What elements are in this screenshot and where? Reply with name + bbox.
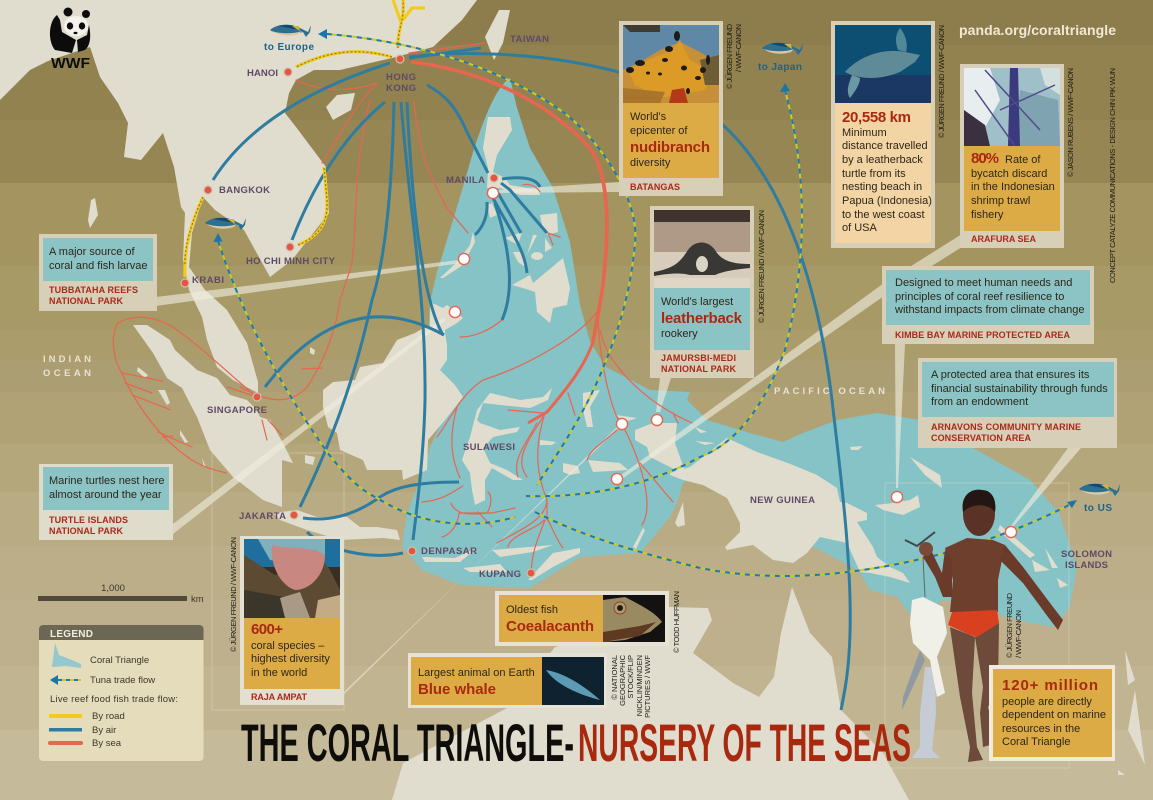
panel: Jamursbi-Medi leatherback rookery: World's largest — [661, 296, 733, 308]
city labels: MANILA — [446, 175, 485, 186]
city labels: NEW GUINEA — [750, 495, 815, 506]
panel: Raja Ampat coral: 600+ — [251, 621, 283, 638]
coral triangle region — [402, 78, 1077, 627]
legend: Tuna trade flow — [90, 675, 155, 686]
panel: Blue whale: Largest animal on Earth — [418, 667, 535, 679]
panel: leatherback turtle distance: of USA — [842, 222, 878, 234]
panel: Tubbataha: coral and fish larvae — [49, 260, 147, 272]
panel: Raja Ampat coral: coral species – — [251, 640, 325, 652]
photo credit: STOCK/FLIP — [626, 655, 635, 699]
ocean labels: PACIFIC OCEAN — [774, 386, 885, 397]
callout beams — [156, 182, 1081, 702]
photo credit — [610, 654, 652, 718]
panel: Jamursbi-Medi leatherback rookery — [650, 206, 754, 378]
panel: leatherback turtle distance: by a leatherback — [842, 154, 923, 166]
panel: Coelacanth — [495, 591, 669, 646]
panel: 120+ million — [989, 665, 1115, 761]
scale bar: 1,000 — [101, 583, 125, 594]
legend — [39, 625, 204, 761]
photo credit — [1005, 592, 1023, 658]
website link: panda.org/coraltriangle — [959, 22, 1116, 38]
panel: Blue whale — [408, 653, 607, 708]
legend: LEGEND — [50, 629, 93, 640]
panel: 120+ million: dependent on marine — [1002, 709, 1106, 721]
panel: Kimbe Bay: principles of coral reef resilience to — [895, 291, 1064, 303]
panel: leatherback turtle distance: distance travelled — [842, 140, 928, 152]
panel: Arnavons: ARNAVONS COMMUNITY MARINE — [931, 422, 1081, 432]
panel: Tubbataha: TUBBATAHA REEFS — [49, 285, 138, 295]
panel: Kimbe Bay — [882, 266, 1094, 344]
panel: Arafura Sea bycatch — [960, 64, 1064, 248]
panel: leatherback turtle distance: Minimum — [842, 127, 887, 139]
panel: Arafura Sea bycatch: Rate of — [1005, 154, 1041, 166]
destination labels: to Europe — [264, 42, 314, 53]
panel: Jamursbi-Medi leatherback rookery: NATIONAL PARK — [661, 364, 736, 374]
panel: Tubbataha: NATIONAL PARK — [49, 296, 124, 306]
panel: Batangas nudibranch: World's — [630, 111, 667, 123]
panel: Arnavons — [918, 358, 1117, 448]
city labels — [192, 34, 1112, 580]
city labels: ISLANDS — [1065, 560, 1108, 571]
icon: arrowhead to Japan — [780, 83, 790, 92]
legend: By air — [92, 725, 116, 736]
panel: Kimbe Bay: withstand impacts from climate change — [894, 304, 1085, 316]
panel: Coelacanth: Oldest fish — [506, 604, 558, 616]
scale bar: km — [191, 594, 204, 605]
legend: Live reef food fish trade flow: — [50, 694, 178, 705]
city labels: SOLOMON — [1061, 549, 1112, 560]
city labels: HO CHI MINH CITY — [246, 256, 336, 267]
legend: By road — [92, 711, 125, 722]
panel: Raja Ampat coral: RAJA AMPAT — [251, 692, 308, 702]
panel: Turtle Islands: TURTLE ISLANDS — [49, 515, 128, 525]
panel: Batangas nudibranch: nudibranch — [630, 139, 710, 156]
photo credit: © JÜRGEN FREUND / WWF-CANON — [757, 210, 766, 323]
photo credit: © NATIONAL — [610, 655, 619, 700]
panel: Kimbe Bay: Designed to meet human needs and — [895, 277, 1072, 289]
icon: arrowhead to Krabi — [214, 233, 222, 242]
panel: Arnavons: from an endowment — [931, 396, 1028, 408]
photo credit: © JÜRGEN FREUND — [1005, 592, 1014, 658]
destination labels: to US — [1084, 503, 1112, 514]
legend: By sea — [92, 738, 122, 749]
panel: Raja Ampat coral: highest diversity — [251, 653, 330, 665]
icon: WWF panda logo — [50, 8, 90, 72]
trade routes: by road — [185, 0, 425, 277]
panel: Turtle Islands: NATIONAL PARK — [49, 526, 124, 536]
panel: Jamursbi-Medi leatherback rookery: leatherback — [661, 310, 743, 327]
photo credit: © JÜRGEN FREUND — [725, 23, 734, 89]
panel: Tubbataha: A major source of — [49, 246, 136, 258]
panel: Tubbataha — [39, 234, 157, 311]
city markers — [181, 55, 535, 577]
panel: Turtle Islands: almost around the year — [49, 489, 162, 501]
panel: Blue whale: Blue whale — [418, 681, 496, 698]
thin image frames — [212, 453, 1069, 768]
destination labels: to Japan — [758, 62, 802, 73]
photo credit: NICKLIN/MINDEN — [635, 655, 644, 716]
panel: Batangas nudibranch — [619, 21, 723, 196]
ocean labels: INDIAN — [43, 354, 91, 365]
panel: leatherback turtle distance: Papua (Indonesia) — [842, 195, 932, 207]
panel: Arnavons: financial sustainability through funds — [931, 383, 1108, 395]
panel: Turtle Islands — [39, 464, 173, 540]
New Guinea — [670, 438, 910, 583]
panel: leatherback turtle distance: 20,558 km — [842, 109, 911, 126]
panel: Arafura Sea bycatch: shrimp trawl — [971, 195, 1030, 207]
legend: Coral Triangle — [90, 655, 149, 666]
photo credit: © JÜRGEN FREUND / WWF-CANON — [229, 537, 238, 652]
scale bar — [38, 583, 204, 605]
trade routes: by air — [213, 48, 850, 710]
panel: 120+ million: resources in the — [1002, 723, 1080, 735]
icon: arrowhead to Europe — [318, 29, 327, 39]
city labels: DENPASAR — [421, 546, 477, 557]
panel: Raja Ampat coral — [240, 536, 344, 705]
icon: arrowhead to US — [1067, 500, 1077, 508]
panel: Jamursbi-Medi leatherback rookery: JAMURSBI-MEDI — [661, 353, 736, 363]
panel: Batangas nudibranch: BATANGAS — [630, 182, 680, 192]
city labels: TAIWAN — [510, 34, 549, 45]
city labels: HANOI — [247, 68, 278, 79]
photo credit: © JÜRGEN FREUND / WWF-CANON — [937, 25, 946, 138]
panel: Arafura Sea bycatch: 80% — [971, 150, 999, 167]
destination labels — [264, 42, 1112, 514]
panel: Arnavons: A protected area that ensures its — [931, 369, 1090, 381]
panel: leatherback turtle distance — [831, 21, 935, 248]
city labels: KRABI — [192, 275, 224, 286]
photo credit: © TODD HUFFMAN — [672, 591, 681, 653]
panel: Turtle Islands: Marine turtles nest here — [49, 475, 165, 487]
panel: leatherback turtle distance: to the west coast — [842, 209, 925, 221]
photo credit: PICTURES / WWF — [643, 655, 652, 718]
panel: Arafura Sea bycatch: bycatch discard — [971, 168, 1047, 180]
panel: 120+ million: 120+ million — [1002, 677, 1098, 694]
panel: 120+ million: people are directly — [1002, 696, 1092, 708]
city labels: SULAWESI — [463, 442, 515, 453]
ocean labels: OCEAN — [43, 368, 91, 379]
photo credit: / WWF-CANON — [1014, 610, 1023, 658]
panel: Arafura Sea bycatch: fishery — [971, 209, 1004, 221]
photo: boy holding fish — [902, 490, 1063, 762]
WWF wordmark: WWF — [51, 56, 90, 72]
panel: Kimbe Bay: KIMBE BAY MARINE PROTECTED AREA — [895, 330, 1070, 340]
ocean labels — [43, 354, 885, 397]
Philippines — [483, 117, 540, 195]
marine site markers — [449, 187, 1017, 538]
photo credit: / WWF-CANON — [734, 24, 743, 72]
panel: Raja Ampat coral: in the world — [251, 667, 307, 679]
photo credit: © JASON RUBENS / WWF-CANON — [1066, 68, 1075, 177]
panel: Arafura Sea bycatch: ARAFURA SEA — [971, 234, 1036, 244]
panel: Arnavons: CONSERVATION AREA — [931, 433, 1032, 443]
legend swatch: air — [49, 728, 82, 732]
panel: 120+ million: Coral Triangle — [1002, 736, 1070, 748]
photo credit — [725, 23, 743, 89]
panel: leatherback turtle distance: nesting beach in — [842, 181, 922, 193]
legend swatch: road — [49, 714, 82, 718]
legend swatch: sea — [48, 741, 83, 745]
trade routes: by sea — [113, 43, 692, 573]
panel: Arafura Sea bycatch: in the Indonesian — [971, 181, 1055, 193]
tuna trade flow routes — [214, 29, 1077, 576]
city labels: KUPANG — [479, 569, 521, 580]
city labels: JAKARTA — [239, 511, 286, 522]
city labels: BANGKOK — [219, 185, 270, 196]
title: THE CORAL TRIANGLE- — [241, 714, 574, 773]
panel: Jamursbi-Medi leatherback rookery: rookery — [661, 328, 698, 340]
icon: coral triangle swatch — [52, 643, 81, 668]
city labels: KONG — [386, 83, 416, 94]
design credit: CONCEPT CATALYZE COMMUNICATIONS - DESIGN CHIN PIK WUN — [1108, 68, 1117, 283]
panel: Batangas nudibranch: diversity — [630, 157, 671, 169]
panel: Coelacanth: Coealacanth — [506, 618, 594, 635]
city labels: SINGAPORE — [207, 405, 267, 416]
photo credit: GEOGRAPHIC — [618, 654, 627, 706]
fish icons — [205, 25, 1120, 496]
city labels: HONG — [386, 72, 416, 83]
panel: Batangas nudibranch: epicenter of — [630, 125, 688, 137]
icon: tuna flow arrow — [50, 675, 81, 685]
panel: leatherback turtle distance: turtle from its — [842, 168, 906, 180]
